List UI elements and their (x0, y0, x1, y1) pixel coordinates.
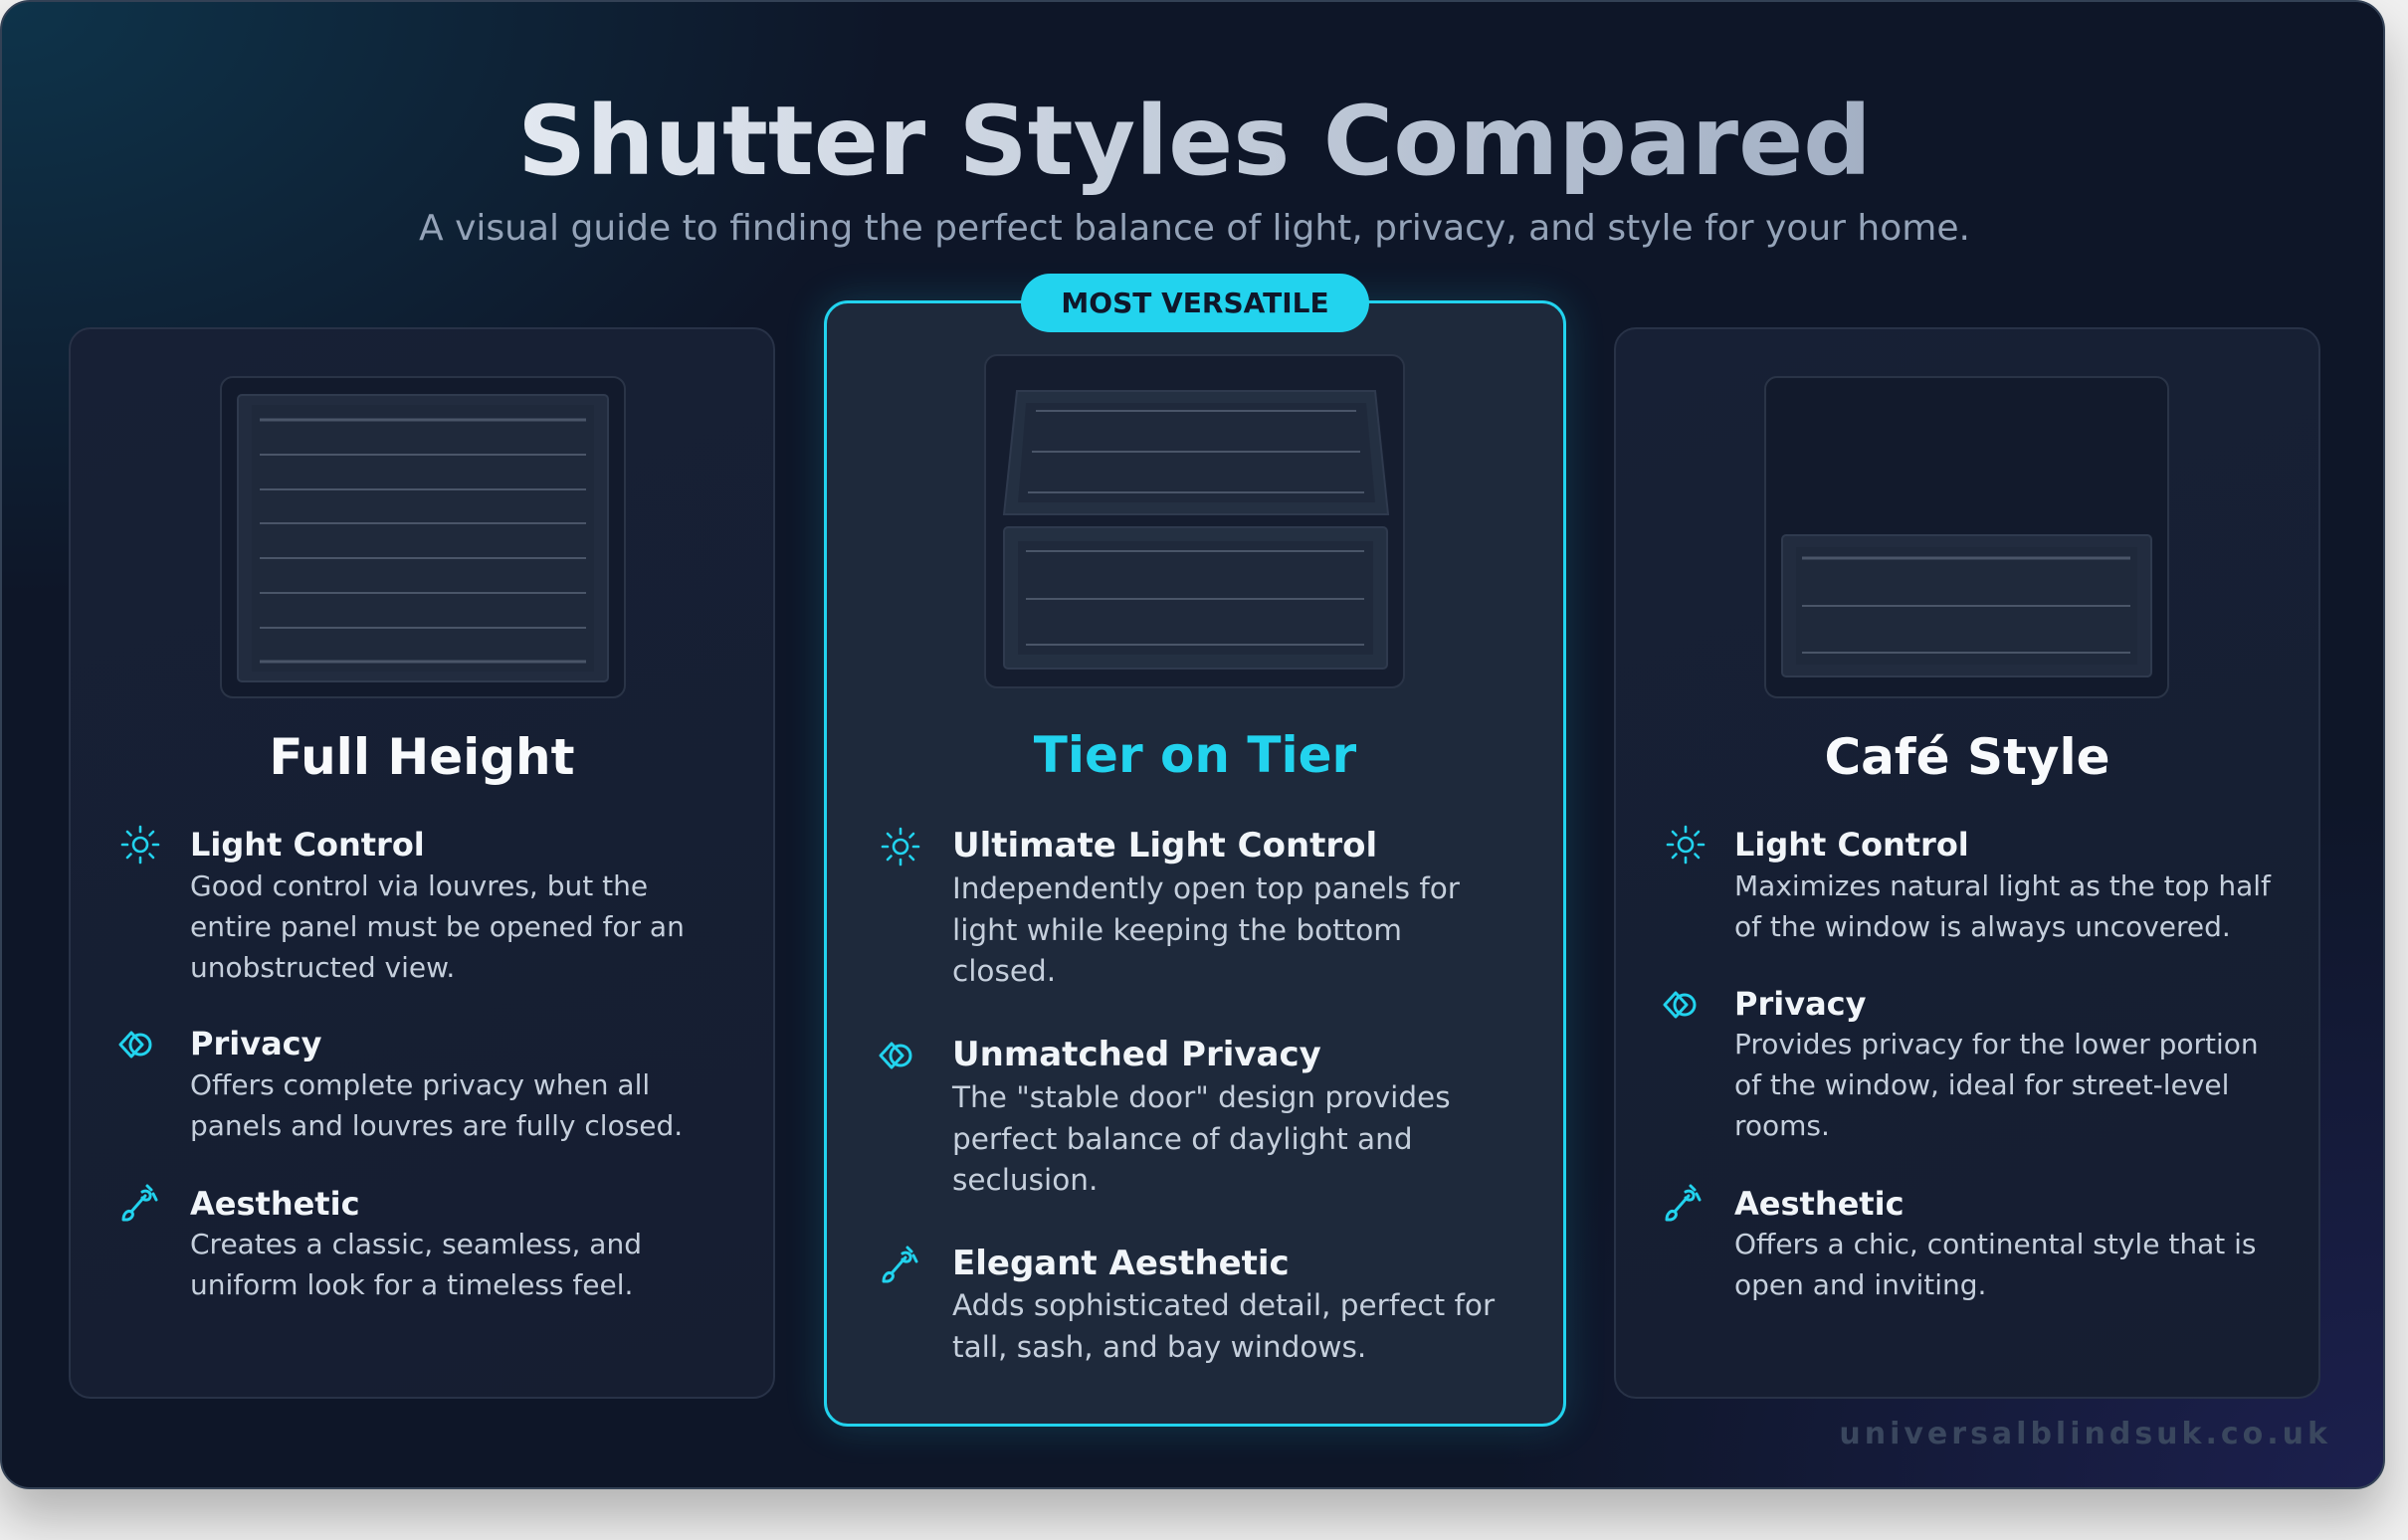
body: aesthetic (190, 1228, 642, 1301)
body: light control: unobstructed view. (190, 951, 455, 984)
item: aesthetic: Aesthetic (190, 1185, 360, 1223)
body: light control: Maximizes natural light as the top half (1734, 869, 2271, 902)
heading: tier on tier: Tier on Tier (1034, 726, 1356, 784)
badge: most versatile: MOST VERSATILE (1061, 287, 1329, 319)
item: unmatched privacy: Unmatched Privacy (952, 1035, 1321, 1074)
icon: brush (882, 1246, 918, 1283)
item: privacy: Privacy (190, 1025, 321, 1062)
title: Shutter Styles Compared (517, 86, 1872, 197)
body: unmatched privacy: The "stable door" design provides (952, 1080, 1451, 1114)
body: light control (190, 869, 685, 984)
panel: full height (69, 327, 775, 1399)
icon: brush (1666, 1184, 1702, 1222)
body: light control: Good control via louvres, but the (190, 869, 648, 902)
item: light control: Light Control (1734, 826, 1969, 864)
item: aesthetic: Aesthetic (1734, 1185, 1905, 1223)
body: unmatched privacy: seclusion. (952, 1163, 1098, 1197)
body: aesthetic: uniform look for a timeless feel. (190, 1268, 633, 1301)
body: elegant aesthetic (952, 1288, 1495, 1363)
icon: privacy (1664, 991, 1696, 1019)
body: privacy: Offers complete privacy when all (190, 1068, 650, 1101)
icon: privacy (119, 1031, 151, 1059)
item: ultimate light control: Ultimate Light Control (952, 826, 1377, 866)
item: light control: Light Control (190, 826, 425, 864)
icon: sun (882, 828, 919, 866)
heading: cafe style: Café Style (1824, 728, 2110, 786)
body: elegant aesthetic: Adds sophisticated detail, perfect for (952, 1288, 1495, 1322)
body: aesthetic: Offers a chic, continental style that is (1734, 1228, 2256, 1260)
body: light control: entire panel must be opened for an (190, 910, 685, 943)
panel: tier on tier (824, 300, 1566, 1427)
body: aesthetic: open and inviting. (1734, 1268, 1986, 1301)
body: privacy: panels and louvres are fully closed. (190, 1109, 683, 1142)
icon: sun (1666, 826, 1706, 864)
body: unmatched privacy (951, 1080, 1451, 1197)
body: light control: of the window is always uncovered. (1734, 910, 2231, 943)
body: privacy: Provides privacy for the lower portion (1734, 1028, 2259, 1060)
icon: privacy (880, 1042, 911, 1069)
body: aesthetic (1734, 1228, 2256, 1301)
body: privacy: rooms. (1734, 1109, 1830, 1142)
body: ultimate light control: Independently open top panels for (952, 871, 1460, 905)
body: ultimate light control: light while keeping the bottom (952, 913, 1402, 947)
heading: full height: Full Height (269, 728, 575, 786)
panel: cafe style (1614, 327, 2320, 1399)
body: ultimate light control: closed. (952, 954, 1056, 988)
body: aesthetic: Creates a classic, seamless, and (190, 1228, 642, 1260)
body: privacy (190, 1068, 683, 1142)
body: privacy: of the window, ideal for street-level (1734, 1068, 2229, 1101)
icon: sun (121, 826, 159, 864)
body: elegant aesthetic: tall, sash, and bay windows. (952, 1329, 1366, 1363)
body: unmatched privacy: perfect balance of daylight and (952, 1122, 1413, 1156)
subtitle: A visual guide to finding the perfect balance of light, privacy, and style for your home. (419, 208, 1970, 249)
icon: brush (121, 1184, 158, 1222)
item: privacy: Privacy (1734, 985, 1866, 1023)
body: light control (1734, 869, 2271, 943)
footer: website: universalblindsuk.co.uk (1839, 1417, 2331, 1451)
body: ultimate light control (952, 871, 1460, 988)
badge: most versatile (1021, 274, 1369, 332)
body: privacy (1734, 1028, 2259, 1142)
item: elegant aesthetic: Elegant Aesthetic (952, 1244, 1290, 1283)
